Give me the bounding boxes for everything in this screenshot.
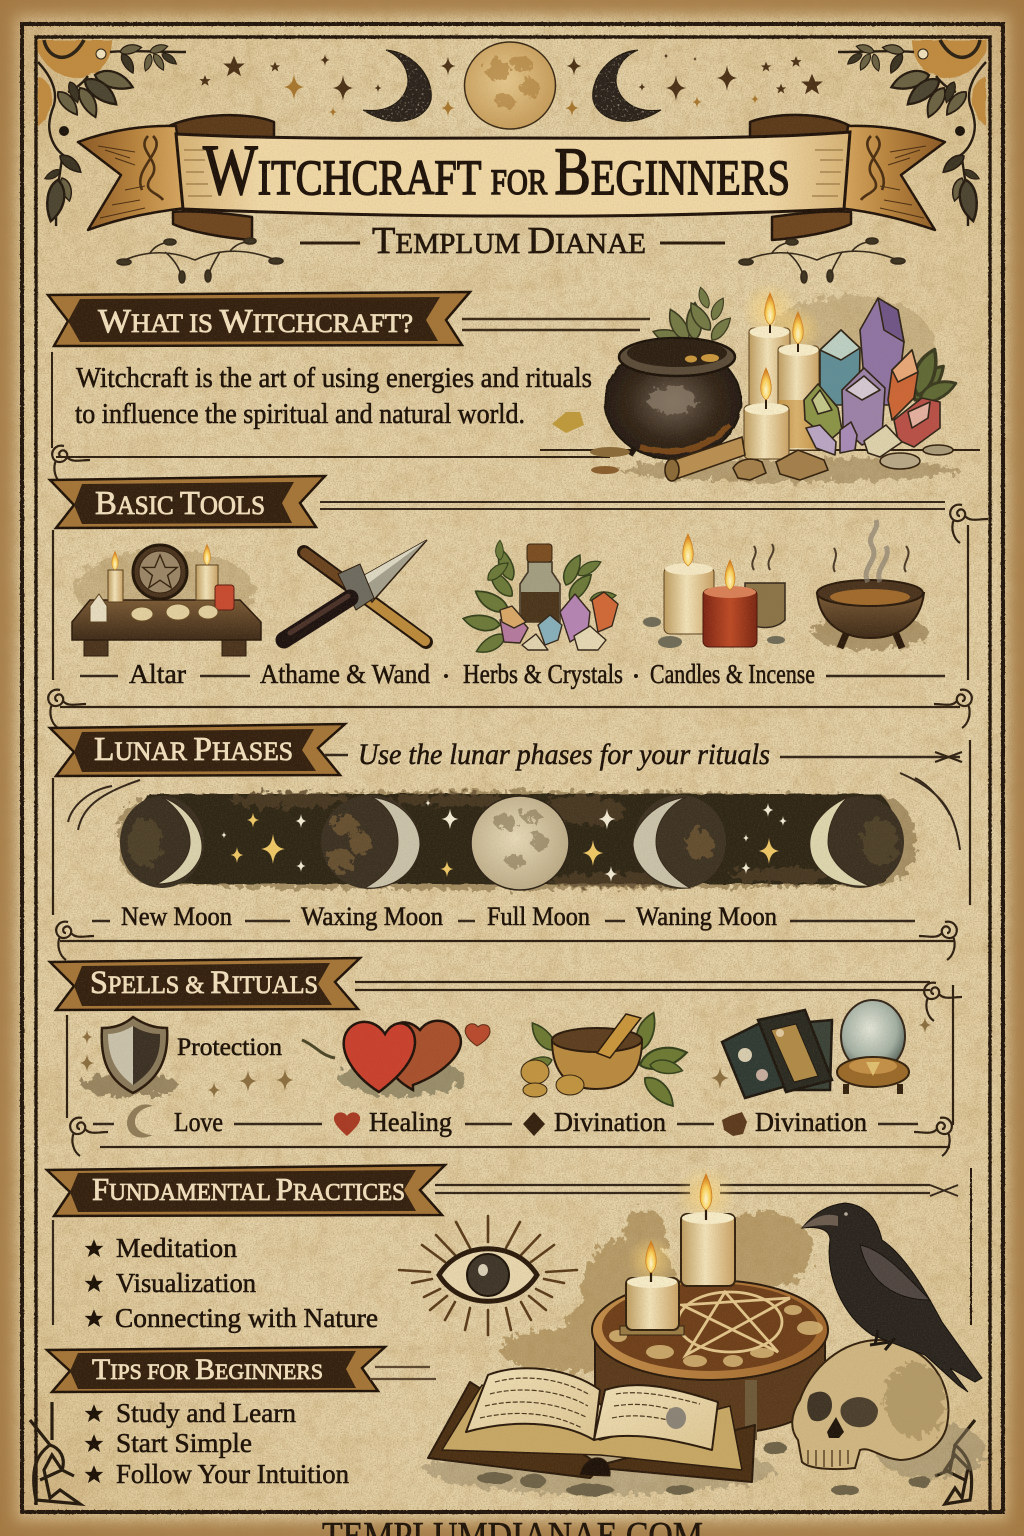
stars in sky band	[231, 812, 779, 877]
ribbon tails	[78, 115, 945, 240]
title ribbon	[78, 115, 945, 240]
labels: spells: Love	[174, 1107, 223, 1137]
open book	[428, 1368, 755, 1482]
moon: new	[120, 796, 204, 888]
label: protection: Protection	[177, 1034, 283, 1061]
section: what is witchcraft	[48, 292, 980, 484]
section: spells and rituals	[50, 958, 962, 1156]
heading banner	[50, 724, 345, 776]
list: practices: Meditation	[116, 1233, 238, 1263]
labels: tools: Candles & Incense	[650, 659, 815, 689]
heading banner	[50, 958, 360, 1010]
heading banner: BASIC TOOLS	[95, 485, 265, 522]
icon: mortar and pestle	[521, 1010, 689, 1111]
list: practices: Visualization	[116, 1268, 256, 1298]
icon: tarot cards	[722, 1010, 832, 1098]
labels: tools: Herbs & Crystals	[463, 659, 623, 689]
icon: waning crescent	[593, 50, 661, 121]
icon: leaf bullet	[722, 1112, 747, 1136]
scroll and stones	[552, 412, 953, 481]
icon: candles and incense	[643, 534, 785, 648]
labels: phases: Waxing Moon	[301, 902, 443, 931]
icon: crystal ball	[837, 1000, 909, 1094]
labels: spells: Divination	[554, 1107, 666, 1137]
flourish left	[117, 238, 283, 283]
labels: phases	[92, 902, 915, 931]
section: fundamental practices	[47, 1165, 958, 1333]
heading banner: FUNDAMENTAL PRACTICES	[92, 1171, 405, 1207]
icon: altar	[72, 544, 261, 656]
labels: spells	[93, 1104, 918, 1138]
icon: hearts	[302, 1021, 490, 1096]
section: lunar phases	[50, 724, 970, 960]
small decorative stars	[80, 1017, 931, 1098]
list: practices: Connecting with Nature	[115, 1303, 378, 1333]
lunar caption: Use the lunar phases for your rituals	[358, 738, 770, 771]
moon: waning	[633, 795, 726, 889]
celestial header: moons and stars	[199, 42, 823, 129]
icon: athame and wand	[284, 540, 427, 642]
heading banner	[47, 1347, 385, 1392]
description text: to influence the spiritual and natural world.	[75, 399, 525, 430]
icon: heart bullet	[334, 1112, 360, 1136]
section: basic tools	[48, 476, 988, 728]
candles	[742, 282, 822, 459]
raven	[802, 1203, 982, 1392]
labels: spells: Divination	[755, 1107, 867, 1137]
labels: spells: Healing	[369, 1107, 452, 1137]
ink wash behind table	[500, 1209, 813, 1372]
stars	[199, 53, 823, 101]
round table	[592, 1280, 828, 1440]
heading banner: SPELLS & RITUALS	[90, 965, 318, 1001]
labels: phases: Full Moon	[487, 902, 590, 931]
list: tips: Study and Learn	[116, 1398, 297, 1428]
flourish right	[739, 238, 905, 283]
icon: smoking bowl	[812, 520, 928, 650]
heading banner: TIPS FOR BEGINNERS	[92, 1353, 323, 1386]
heading banner: WHAT IS WITCHCRAFT?	[98, 303, 413, 340]
subtitle: Templum Dianae: TEMPLUM DIANAE	[372, 220, 646, 262]
icon: herbs and crystals	[462, 540, 618, 658]
icon: crescent bullet	[127, 1104, 153, 1138]
description text	[75, 363, 592, 430]
icon: full moon	[464, 42, 556, 129]
icon: shield	[82, 1017, 178, 1097]
icon: waxing crescent	[363, 50, 431, 121]
section: tips for beginners	[47, 1347, 436, 1489]
icon: diamond bullet	[523, 1112, 545, 1136]
ribbon knotwork and hatching	[98, 136, 926, 218]
list: tips: Start Simple	[116, 1428, 252, 1458]
moon: full	[471, 796, 569, 890]
short candle	[620, 1236, 684, 1335]
labels: phases: New Moon	[121, 902, 232, 931]
list: practices	[85, 1233, 378, 1333]
night sky band	[117, 791, 916, 890]
labels: tools	[80, 659, 945, 689]
illustration: cauldron, candles and crystals	[552, 282, 960, 482]
scattered stones	[477, 1442, 931, 1496]
crystals	[804, 298, 959, 457]
heading banner	[50, 476, 325, 528]
list: tips	[85, 1398, 349, 1489]
herb sprig	[651, 286, 734, 347]
heading banner: LUNAR PHASES	[94, 731, 293, 768]
corner ornaments: bottom	[30, 1402, 975, 1504]
list: tips: Follow Your Intuition	[116, 1459, 349, 1489]
title: WITCHCRAFT FOR BEGINNERS	[203, 130, 790, 210]
heading banner	[48, 292, 470, 346]
corner vines: top-left	[38, 40, 186, 226]
cauldron	[605, 338, 741, 459]
icon: all-seeing eye	[399, 1216, 577, 1335]
illustration: altar still life	[425, 1165, 985, 1496]
tall candle	[676, 1165, 736, 1286]
labels: tools: Altar	[129, 659, 186, 689]
skull	[792, 1340, 948, 1469]
description text: Witchcraft is the art of using energies and rituals	[76, 363, 592, 394]
labels: tools: Athame & Wand	[260, 659, 430, 689]
labels: phases: Waning Moon	[636, 902, 777, 931]
moon: dark crescent	[810, 796, 904, 888]
moon: waxing	[321, 795, 420, 889]
corner vines: top-right	[838, 40, 986, 226]
heading banner	[47, 1165, 445, 1216]
ribbon centre band	[176, 132, 850, 216]
